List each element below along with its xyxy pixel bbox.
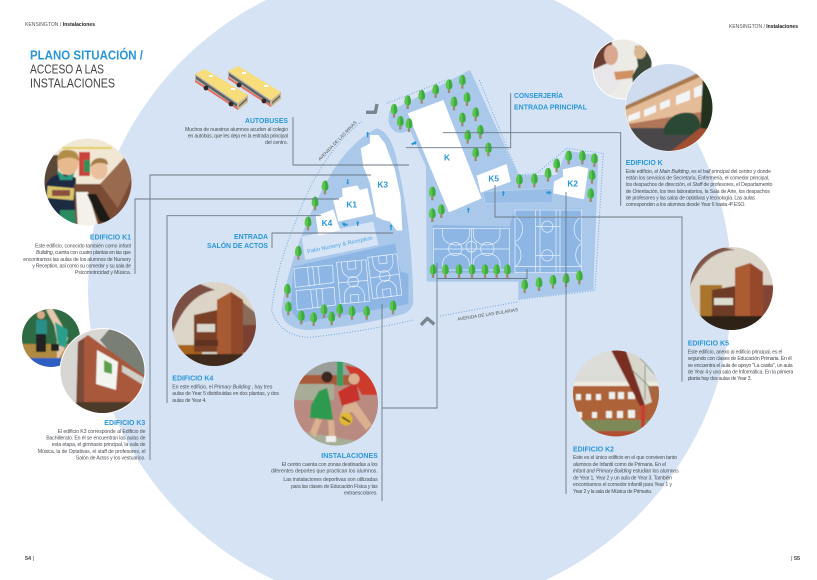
text: Edificio K3: Salón de Actos y los vestuarios. bbox=[76, 456, 146, 462]
text: Edificio K: están los servicios de Secretaría, Enfermería, el comedor principal, bbox=[626, 176, 769, 182]
text: Autobuses: Muchos de nuestros alumnos acuden al colegio bbox=[185, 127, 288, 133]
courts right bbox=[433, 228, 509, 270]
dotted perimeter bbox=[272, 80, 603, 337]
background circle bbox=[88, 0, 732, 580]
text: Edificio K2 bbox=[573, 444, 679, 495]
text: Edificio K1: encontramos las aulas de los alumnos de Nursery bbox=[23, 257, 131, 263]
text: Edificio K5: de Year 4 y una sala de Informática. En la primera bbox=[688, 370, 794, 376]
page number left: 54 | bbox=[25, 556, 34, 562]
text: Edificio K: Este edificio, el Main Building, es el hall principal del centro y donde bbox=[626, 169, 771, 175]
text: Instalaciones bbox=[271, 451, 378, 496]
text: Instalaciones: para las clases de Educación Física y las bbox=[291, 484, 378, 490]
text: Edificio K4: EDIFICIO K4 bbox=[172, 374, 214, 382]
courts left bbox=[294, 265, 335, 310]
text: Edificio K3: esta etapa, el gimnasio principal, la sala de bbox=[52, 442, 146, 448]
text: Edificio K5: EDIFICIO K5 bbox=[688, 338, 730, 348]
building K4: K4 bbox=[322, 218, 333, 228]
building K4 bbox=[316, 209, 340, 235]
photo: K reception bbox=[592, 40, 652, 100]
text: Edificio K2: alumnos de Infantil como de Primaria. En el bbox=[573, 462, 666, 468]
trees bbox=[284, 75, 598, 326]
text: Edificio K: de profesores y las salas de optativas y tecnología. Las aulas bbox=[626, 196, 755, 202]
building K2 bbox=[553, 166, 588, 199]
text: Instalaciones: INSTALACIONES bbox=[321, 451, 378, 460]
text: Edificio K1: Este edificio, conocido también como infant bbox=[35, 243, 132, 249]
service road bbox=[483, 188, 553, 203]
photo: K3 gym bbox=[22, 309, 80, 367]
compass chevrons bbox=[366, 104, 434, 325]
photo: K3 building bbox=[60, 328, 146, 413]
text: Edificio K2: Year 2 y la sala de Música de Primaria. bbox=[573, 489, 652, 495]
text: Conserjería: CONSERJERÍA bbox=[514, 91, 563, 100]
text: Edificio K5: segundo con clases de Educación Primaria. En él bbox=[688, 356, 792, 362]
title bbox=[30, 48, 143, 90]
text: Edificio K: EDIFICIO K bbox=[626, 158, 663, 167]
building K5 bbox=[477, 164, 511, 193]
photo: K2 building bbox=[573, 350, 659, 436]
text: Edificio K4: En este edificio, el Primary Building , hay tres bbox=[172, 384, 273, 390]
text: Edificio K5 bbox=[688, 338, 794, 382]
text: Edificio K: de Orientación, los tres laboratorios, la Sala de Arte, los despachos bbox=[626, 189, 770, 195]
text: Edificio K2: EDIFICIO K2 bbox=[573, 444, 614, 454]
photo: K1 children at piano bbox=[44, 138, 132, 226]
text: Edificio K5: planta hay dos aulas de Year 3. bbox=[688, 376, 752, 382]
text: Autobuses bbox=[185, 116, 288, 146]
text: Edificio K1 bbox=[23, 232, 132, 276]
text: Autobuses: AUTOBUSES bbox=[245, 116, 288, 125]
text: Edificio K1: y Reception, así como su comedor y su sala de bbox=[32, 264, 131, 270]
title: INSTALACIONES bbox=[30, 76, 115, 90]
text: Edificio K2: de Year 1, Year 2 y un aula de Year 3. También bbox=[573, 476, 672, 482]
page header left: KENSINGTON / Instalaciones bbox=[25, 22, 95, 28]
text: Edificio K2: encontramos el comedor infantil para Year 1 y bbox=[573, 482, 672, 488]
text: Instalaciones: extraescolares. bbox=[344, 490, 378, 496]
text: Edificio K: los despachos de dirección, el Staff de profesores, el Departamento bbox=[626, 182, 773, 188]
text: Edificio K2: Este es el único edificio en el que conviven tanto bbox=[573, 455, 677, 461]
title: PLANO SITUACIÓN / bbox=[30, 48, 143, 62]
building K bbox=[408, 100, 482, 212]
text: Edificio K bbox=[626, 158, 773, 208]
text: Instalaciones: diferentes deportes que practican los alumnos. bbox=[271, 468, 378, 474]
building K3: K3 bbox=[377, 180, 388, 190]
page header right: KENSINGTON / Instalaciones bbox=[729, 24, 798, 30]
road label: Avenida de las Minas: AVENIDA DE LAS MINAS bbox=[317, 120, 358, 162]
photo: sports bbox=[294, 362, 378, 446]
small access arrows bbox=[342, 132, 552, 230]
text: Edificio K4: aulas de Year 4. bbox=[172, 398, 207, 404]
right campus block bbox=[388, 70, 598, 299]
patio bbox=[302, 222, 378, 260]
text: Edificio K2: Infant and Primary Building estudian los alumnos bbox=[573, 468, 679, 474]
campus map bbox=[272, 70, 603, 337]
text: Edificio K4 bbox=[172, 374, 279, 404]
darker courts area bbox=[291, 243, 408, 323]
icon: buses bbox=[195, 66, 281, 110]
text: Edificio K3: EDIFICIO K3 bbox=[104, 418, 145, 427]
text: Edificio K5: se encuentra el aula de apoyo "La casita", un aula bbox=[688, 363, 793, 369]
building K3 bbox=[361, 135, 402, 231]
building K1 bbox=[333, 185, 373, 222]
photo: K5 building bbox=[690, 247, 773, 330]
road label: Avenida de las Bularias: AVENIDA DE LAS BULARIAS bbox=[457, 307, 518, 322]
text: Edificio K3: Música, la de Optativas, el staff de profesores, el bbox=[38, 449, 145, 455]
patio: Patio Nursery & Reception bbox=[307, 236, 373, 255]
text: Conserjería bbox=[514, 91, 587, 112]
text: Entrada salón de actos: SALÓN DE ACTOS bbox=[207, 241, 268, 250]
building K5: K5 bbox=[488, 173, 499, 183]
text: Edificio K3 bbox=[38, 418, 146, 462]
photo: K4 building bbox=[170, 280, 258, 368]
text: Edificio K3: Bachillerato. En él se encuentran las aulas de bbox=[46, 436, 146, 442]
text: Entrada salón de actos: ENTRADA bbox=[234, 232, 268, 241]
text: Edificio K4: aulas de Year 5 distribuidas en dos plantas, y dos bbox=[172, 391, 279, 397]
building K1: K1 bbox=[346, 200, 357, 210]
text: Edificio K1: EDIFICIO K1 bbox=[90, 232, 132, 242]
building K2: K2 bbox=[567, 179, 578, 189]
text: Instalaciones: El centro cuenta con zonas destinadas a los bbox=[282, 462, 378, 468]
text: Edificio K1: Building, cuenta con cuatro plantas en las que bbox=[36, 250, 131, 256]
text: Edificio K1: Psicomotricidad y Música. bbox=[75, 270, 131, 276]
text: Autobuses: en autobús, que les deja en la entrada principal bbox=[188, 134, 288, 140]
leader lines bbox=[135, 93, 682, 501]
photo: K building bbox=[623, 62, 715, 154]
left campus block bbox=[281, 128, 413, 330]
text: Entrada salón de actos bbox=[207, 232, 268, 250]
building K: K bbox=[444, 152, 450, 162]
text: Instalaciones: Las instalaciones deportivas son utilizadas bbox=[283, 477, 378, 483]
page number right: | 55 bbox=[791, 556, 800, 562]
text: Conserjería: ENTRADA PRINCIPAL bbox=[514, 102, 587, 112]
title: ACCESO A LAS bbox=[30, 62, 104, 76]
text: Edificio K: corresponden a los alumnos desde Year 6 hasta 4º ESO. bbox=[626, 202, 746, 208]
text: Autobuses: del centro. bbox=[265, 140, 288, 146]
text: Edificio K3: El edificio K3 corresponde al Edificio de bbox=[58, 429, 146, 435]
text: Edificio K5: Este edificio, anexo al edificio principal, es el bbox=[688, 350, 782, 356]
